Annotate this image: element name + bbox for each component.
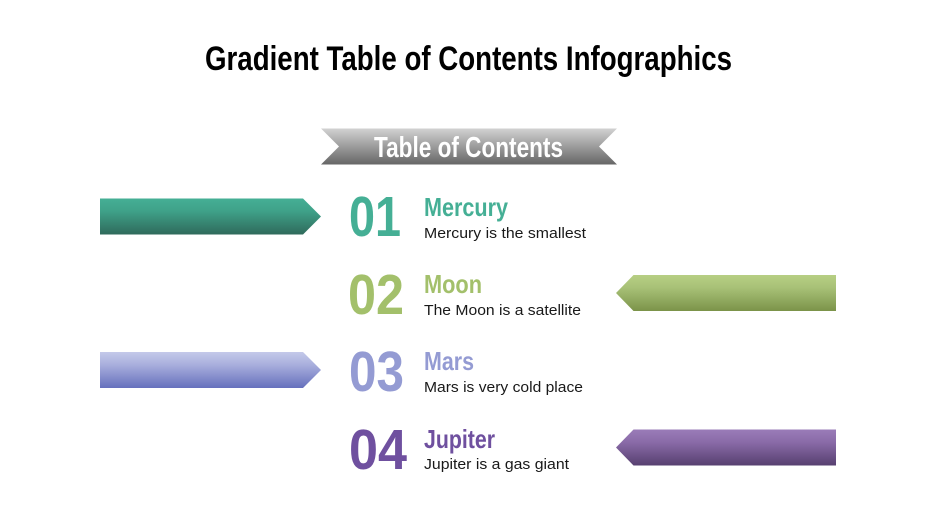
arrow: Jupiter purple (616, 430, 836, 466)
item 03: Mars: 03 (349, 340, 404, 404)
item 01: Mercury: 01 (349, 185, 401, 249)
item 01: Mercury (349, 185, 587, 249)
arrow: Mars periwinkle (100, 352, 321, 388)
item 02: Moon: Moon (424, 269, 482, 299)
title: Gradient Table of Contents Infographics (205, 40, 732, 78)
item 03: Mars: Mars (424, 346, 474, 376)
item 03: Mars: Mars is very cold place (424, 379, 583, 396)
arrow: Mercury teal (100, 198, 321, 234)
item 01: Mercury: Mercury is the smallest (424, 225, 587, 242)
item 02: Moon: The Moon is a satellite (424, 302, 581, 319)
banner: Table of Contents: Table of Contents (374, 132, 563, 164)
item 04: Jupiter: Jupiter is a gas giant (424, 456, 570, 473)
arrow: Moon green (616, 275, 836, 311)
item 04: Jupiter: Jupiter (424, 424, 495, 454)
item 03: Mars (349, 340, 583, 404)
item 04: Jupiter: 04 (349, 418, 407, 482)
item 02: Moon: 02 (348, 263, 404, 327)
item 01: Mercury: Mercury (424, 192, 508, 222)
item 02: Moon (348, 263, 581, 327)
item 04: Jupiter (349, 418, 570, 482)
